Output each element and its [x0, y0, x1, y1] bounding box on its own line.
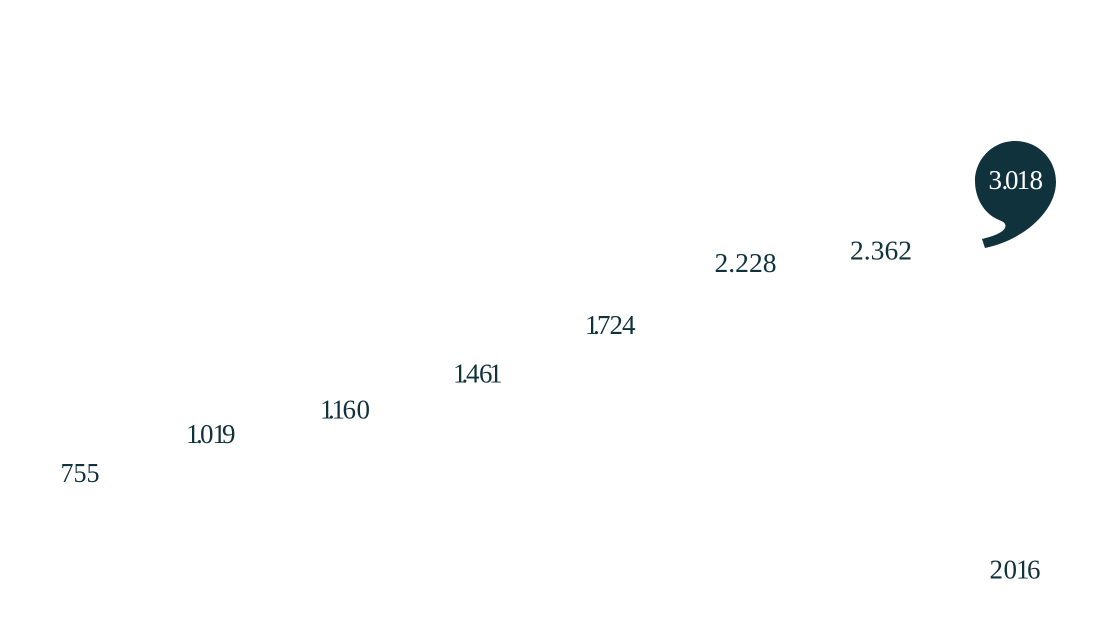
value: 1.461: 1.461: [453, 358, 502, 388]
value: 1.724: 1.724: [585, 310, 636, 340]
icon: comma-shaped bubble: [975, 141, 1056, 248]
value: 3.018: 3.018: [988, 165, 1043, 195]
value: 1.019: 1.019: [186, 419, 236, 449]
year label: 2016: 2016: [990, 554, 1040, 584]
value: 755: 755: [60, 458, 100, 488]
value: 2.362: 2.362: [850, 236, 912, 266]
callout: 3.018 speech bubble: [975, 141, 1056, 248]
value: 1.160: 1.160: [320, 394, 370, 424]
value: 2.228: 2.228: [714, 248, 776, 278]
